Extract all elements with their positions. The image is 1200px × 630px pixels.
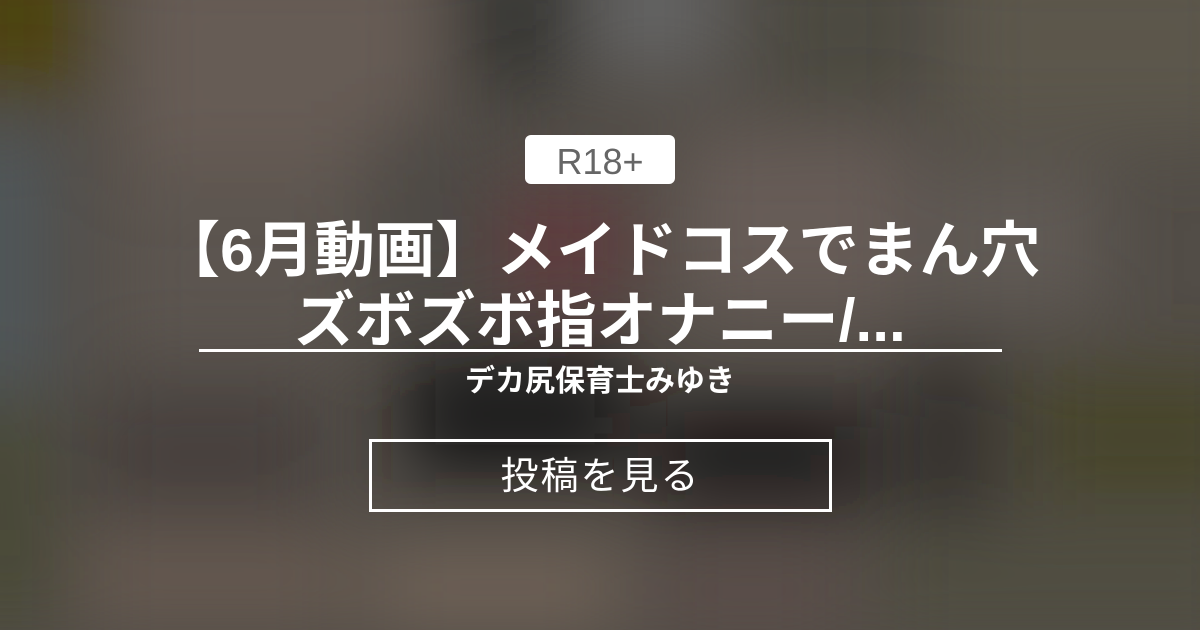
title bbox=[160, 216, 1040, 354]
button: view post bbox=[369, 439, 832, 512]
title: 【6月動画】メイドコスでまん穴 bbox=[160, 216, 1040, 284]
title: ズボズボ指オナニー/... bbox=[294, 286, 906, 354]
badge: R18+: R18+ bbox=[556, 141, 644, 182]
badge: R18+ bbox=[525, 135, 675, 184]
divider line bbox=[199, 349, 1002, 352]
author name: デカ尻保育士みゆき bbox=[465, 365, 735, 398]
button: view post: 投稿を見る bbox=[500, 456, 700, 498]
